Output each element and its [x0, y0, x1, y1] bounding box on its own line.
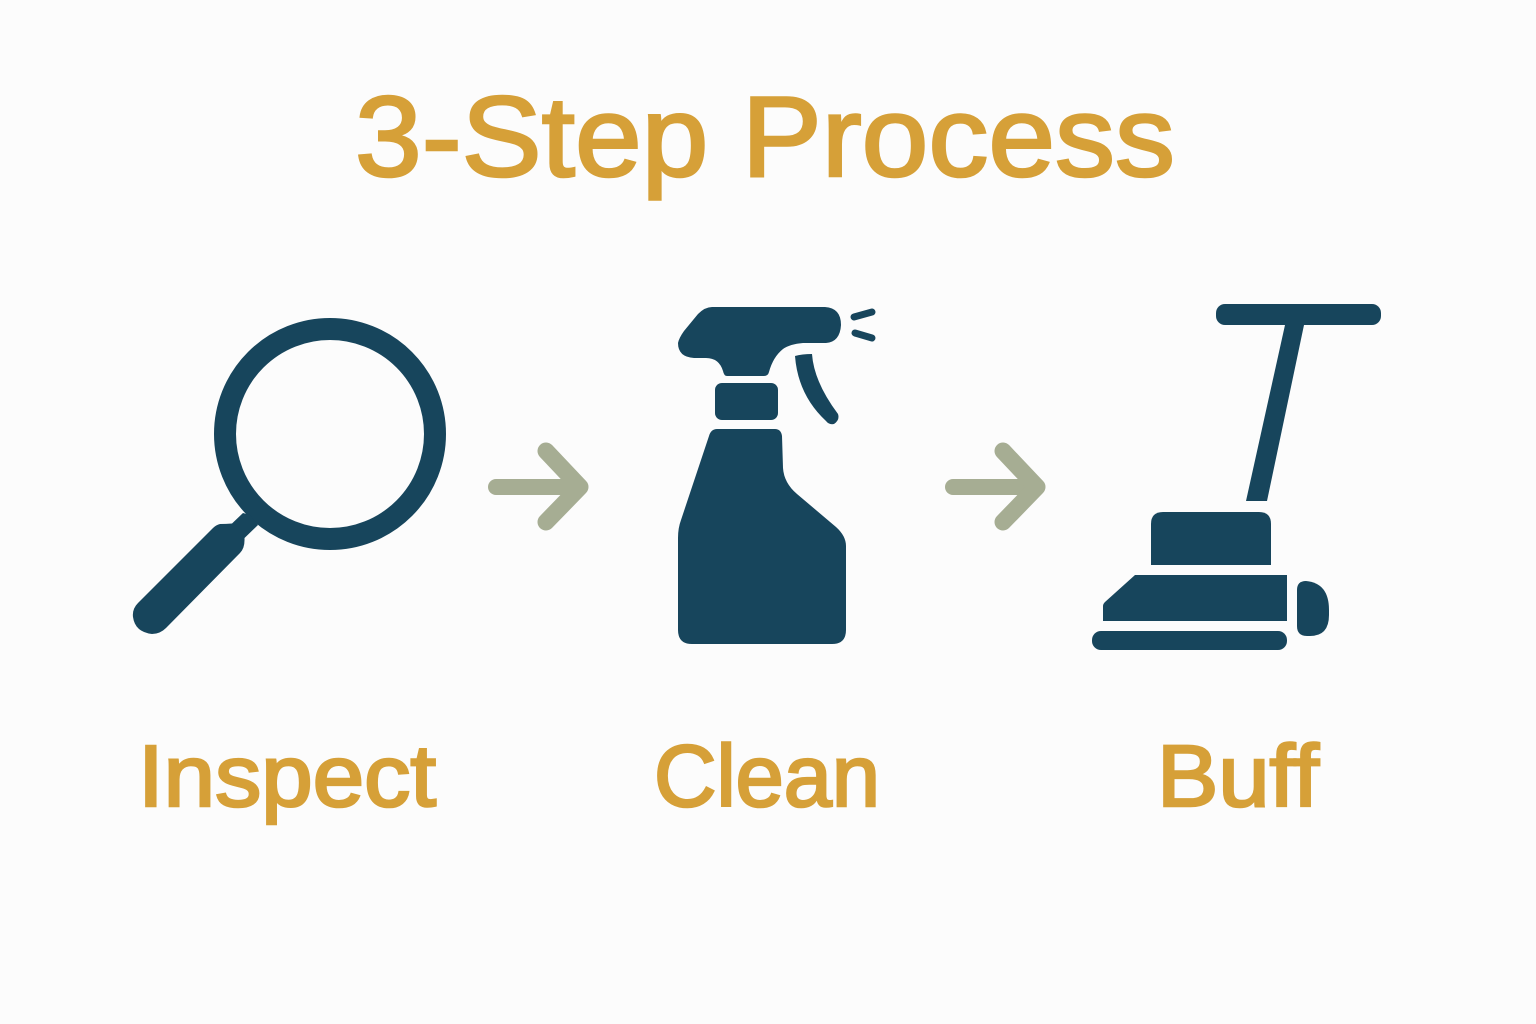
- icon: floor buffer: [1092, 304, 1381, 650]
- icon: magnifying glass: [133, 329, 435, 634]
- arrow: inspect to clean: [496, 451, 580, 522]
- title: 3-Step Process: [355, 74, 1175, 201]
- label: buff: Buff: [1157, 728, 1320, 825]
- label: inspect: Inspect: [138, 728, 436, 825]
- icon: spray bottle: [678, 307, 872, 644]
- arrow: clean to buff: [953, 451, 1037, 522]
- label: clean: Clean: [654, 728, 880, 825]
